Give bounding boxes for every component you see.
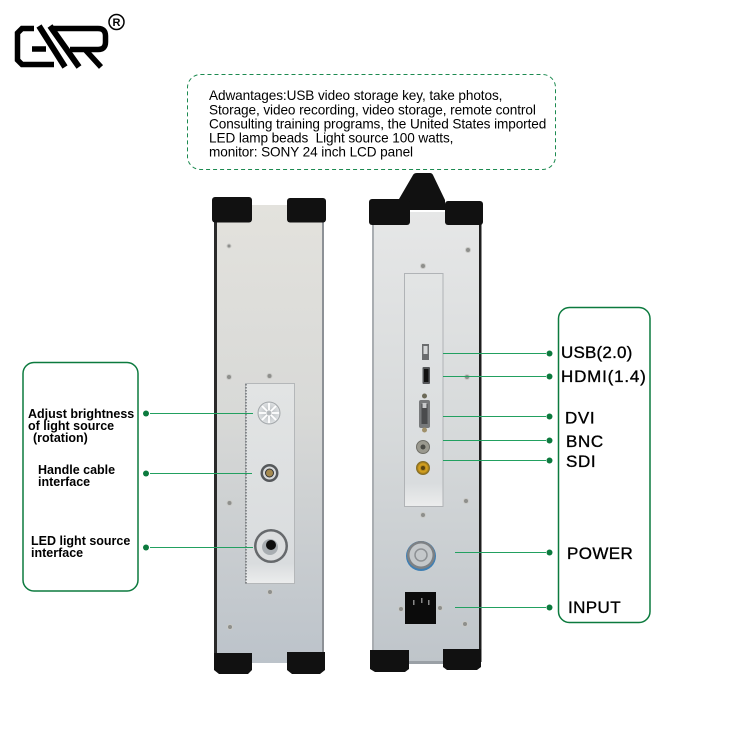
HDMI port (422, 367, 430, 384)
device body (372, 212, 481, 662)
power button (406, 541, 436, 571)
device: right side view (369, 173, 483, 672)
bottom rubber feet (370, 649, 481, 672)
label: POWER: POWER (567, 544, 633, 563)
screws (226, 244, 272, 630)
label: BNC: BNC (566, 432, 604, 451)
handle cable socket (260, 464, 278, 482)
panel: right labels (558, 308, 650, 622)
brightness knob (258, 402, 280, 424)
logo: R (113, 17, 121, 29)
recessed panel (246, 384, 294, 584)
top rubber feet (212, 197, 326, 222)
screws (398, 248, 470, 626)
leader lines: left (143, 410, 253, 550)
input socket (405, 592, 436, 624)
BNC connector (416, 440, 430, 454)
DVI port (419, 394, 430, 432)
panel: advantages callout: LED lamp beads Light source 100 watts, (209, 131, 453, 146)
USB port (422, 344, 429, 360)
label: USB: USB(2.0) (561, 343, 633, 362)
top carrying handle (399, 173, 445, 210)
panel: advantages callout: Consulting training programs, the United States imported (209, 117, 546, 132)
panel: left labels: of light source (28, 419, 114, 433)
LED light source socket (254, 529, 288, 563)
panel: advantages callout (188, 74, 556, 170)
bottom rubber feet (214, 652, 325, 674)
recessed panel (404, 274, 443, 506)
label: handle cable interface: Handle cable (38, 463, 115, 477)
panel: advantages callout: Adwantages:USB video storage key, take photos, (209, 88, 502, 103)
top rubber feet (369, 199, 483, 225)
SDI connector (416, 462, 430, 474)
panel: advantages callout: Storage, video recording, video storage, remote control (209, 102, 536, 118)
label: INPUT: INPUT (568, 598, 621, 617)
leader lines: right (443, 350, 552, 610)
label: LED light source interface: LED light source (31, 534, 130, 548)
logo (18, 14, 124, 67)
device body (214, 205, 324, 663)
label: DVI: DVI (565, 408, 595, 428)
panel: left labels (23, 362, 138, 591)
panel: left labels: (rotation) (33, 431, 88, 445)
panel: advantages callout: monitor: SONY 24 inch LCD panel (209, 145, 413, 160)
panel: left labels: interface (31, 546, 83, 560)
label: HDMI: HDMI(1.4) (561, 367, 647, 386)
panel: left labels: interface (38, 475, 90, 489)
label: SDI: SDI (566, 452, 596, 471)
label: adjust brightness: Adjust brightness (28, 407, 134, 421)
device: left side view (212, 197, 326, 674)
